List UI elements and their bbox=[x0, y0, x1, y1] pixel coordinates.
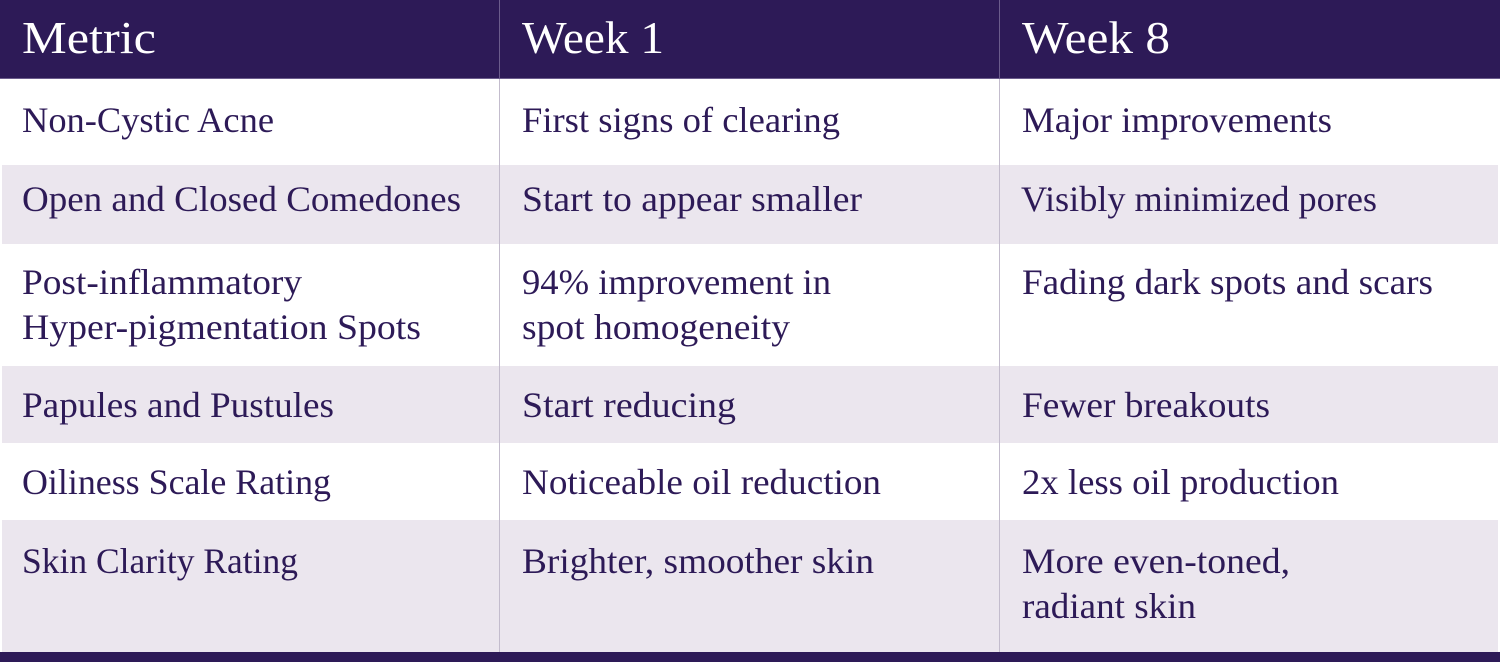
row: Post-inflammatory Hyper-pigmentation Spots bbox=[22, 262, 1433, 347]
header: Metric: Metric bbox=[22, 12, 156, 63]
row: Skin Clarity Rating: radiant skin bbox=[1022, 586, 1196, 626]
row: Oiliness Scale Rating: Noticeable oil reduction bbox=[522, 462, 881, 502]
header row bbox=[0, 0, 1500, 79]
row: Non-Cystic Acne: Non-Cystic Acne bbox=[22, 100, 274, 140]
row: Oiliness Scale Rating bbox=[22, 462, 1339, 502]
row: Non-Cystic Acne: First signs of clearing bbox=[522, 100, 840, 140]
row: Skin Clarity Rating: More even-toned, bbox=[1022, 541, 1290, 581]
row: Non-Cystic Acne bbox=[22, 100, 1332, 140]
row: Post-inflammatory Hyper-pigmentation Spots: Fading dark spots and scars bbox=[1022, 262, 1433, 302]
row: Open and Closed Comedones: Start to appear smaller bbox=[522, 179, 862, 219]
row: Open and Closed Comedones bbox=[22, 179, 1377, 219]
header: Week 1: Week 1 bbox=[522, 12, 664, 63]
shaded row backgrounds bbox=[2, 165, 1498, 652]
row: Oiliness Scale Rating: Oiliness Scale Rating bbox=[22, 462, 331, 502]
row: Post-inflammatory Hyper-pigmentation Spots: Hyper-pigmentation Spots bbox=[22, 307, 421, 347]
row: Post-inflammatory Hyper-pigmentation Spots: 94% improvement in bbox=[522, 262, 831, 302]
row: Post-inflammatory Hyper-pigmentation Spots: spot homogeneity bbox=[522, 307, 790, 347]
row: Papules and Pustules: Fewer breakouts bbox=[1022, 385, 1270, 425]
row: Open and Closed Comedones: Visibly minimized pores bbox=[1021, 179, 1377, 219]
bottom border bar bbox=[0, 652, 1500, 662]
row: Skin Clarity Rating bbox=[22, 541, 1290, 626]
row: Post-inflammatory Hyper-pigmentation Spots: Post-inflammatory bbox=[22, 262, 302, 302]
row: Papules and Pustules: Start reducing bbox=[522, 385, 736, 425]
header: Week 8: Week 8 bbox=[1022, 12, 1170, 63]
row: Papules and Pustules: Papules and Pustules bbox=[22, 385, 334, 425]
row: Papules and Pustules bbox=[22, 385, 1270, 425]
row: Oiliness Scale Rating: 2x less oil production bbox=[1022, 462, 1339, 502]
row: Skin Clarity Rating: Skin Clarity Rating bbox=[22, 541, 298, 581]
row: Open and Closed Comedones: Open and Closed Comedones bbox=[22, 179, 461, 219]
row: Skin Clarity Rating: Brighter, smoother skin bbox=[522, 541, 874, 581]
row: Non-Cystic Acne: Major improvements bbox=[1022, 100, 1332, 140]
